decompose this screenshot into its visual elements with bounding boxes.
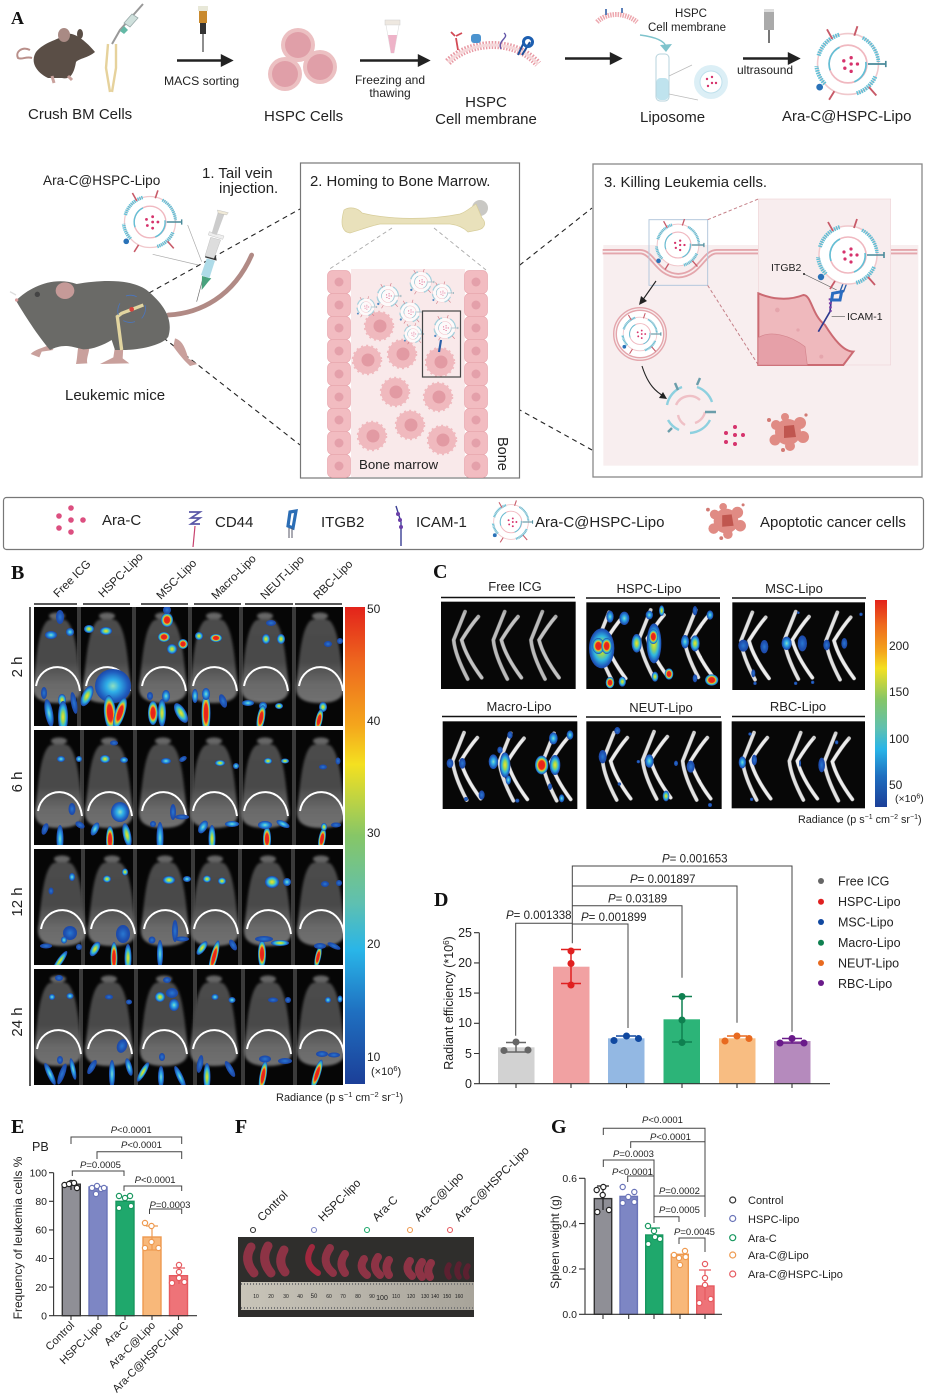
arrow (360, 56, 428, 65)
leukemia cells (353, 312, 456, 454)
colorbar B labels: (×10 (371, 1066, 393, 1078)
colorbar C labels (889, 639, 924, 805)
p-values: P=0.0002 (659, 1186, 700, 1197)
label: Ara-C@HSPC-Lipo: Ara-C@HSPC-Lipo (782, 108, 911, 125)
row labels (9, 657, 26, 1037)
label: HSPC Cells: HSPC Cells (264, 108, 343, 125)
y tick labels (562, 1173, 577, 1321)
colorbar C labels: 6 (916, 794, 920, 800)
bone wall cells (328, 270, 488, 478)
ruler: 150 (443, 1294, 451, 1300)
ruler: 140 (431, 1294, 439, 1300)
Macro signal (447, 730, 573, 803)
icon: CD44 (189, 512, 200, 547)
y axis title: Frequency of leukemia cells % (11, 1156, 25, 1319)
selection box (422, 311, 460, 377)
icon: lipo (493, 500, 533, 542)
panel D: radiant efficiency bar chart (434, 854, 901, 1091)
label: Leukemic mice: Leukemic mice (65, 387, 165, 404)
ruler: 120 (407, 1294, 415, 1300)
y tick labels: 25 (458, 926, 472, 940)
panel letter F: F (235, 1116, 247, 1138)
ruler: 110 (392, 1294, 400, 1300)
imaging row 24 h (34, 969, 345, 1091)
radiance label C: −1 (865, 814, 873, 821)
panel: homing to bone marrow (300, 163, 520, 478)
error bars and points (501, 948, 807, 1053)
colorbar B labels (367, 602, 401, 1078)
ruler: 100 (376, 1295, 388, 1302)
y tick labels: 0 (41, 1310, 47, 1322)
icon: endosome (615, 309, 665, 359)
column headers: RBC-Lipo (312, 558, 355, 602)
ruler: 160 (455, 1294, 463, 1300)
p-values: P<0.0001 (612, 1167, 653, 1178)
ruler: 50 (311, 1294, 318, 1300)
legend D: NEUT-Lipo (838, 956, 899, 970)
radiance label B: Radiance (p s (276, 1092, 344, 1104)
column headers: HSPC-Lipo (97, 551, 146, 600)
icon: HSPC cells (268, 28, 337, 91)
data points (594, 1184, 713, 1306)
panel B: in vivo imaging (9, 551, 403, 1104)
colorbar C labels: 100 (889, 732, 909, 746)
legend D: MSC-Lipo (838, 916, 894, 930)
axes (49, 1173, 197, 1320)
x labels: Ara-C@HSPC-Lipo (111, 1320, 186, 1395)
label: ultrasound: ultrasound (737, 63, 793, 77)
y tick labels: 5 (465, 1047, 472, 1061)
p-values: P<0.0001 (650, 1132, 691, 1143)
y tick labels: 0.0 (562, 1309, 577, 1321)
x labels: Control (44, 1320, 77, 1353)
ruler: 20 (268, 1294, 274, 1300)
icon: curved teal arrow (640, 35, 672, 52)
y tick labels: 10 (458, 1016, 472, 1030)
radiance label C: −2 (890, 814, 898, 821)
legend D: RBC-Lipo (838, 977, 892, 991)
axes (579, 1178, 722, 1319)
colorbar B labels: ) (398, 1066, 401, 1078)
icon: Ara-C@HSPC-Lipo (816, 26, 886, 100)
panel F: spleen photograph (235, 1116, 532, 1317)
label: CD44 (215, 514, 253, 531)
significance brackets (603, 1128, 705, 1252)
legend G: Ara-C@Lipo (748, 1250, 809, 1262)
y tick labels: 80 (35, 1196, 47, 1208)
panel letter D: D (434, 889, 448, 911)
colorbar B labels: 50 (367, 602, 381, 616)
colorbar B labels: 10 (367, 1050, 381, 1064)
HSPC signal (589, 605, 718, 688)
label: Ara-C@HSPC-Lipo: Ara-C@HSPC-Lipo (43, 173, 160, 188)
bars (498, 967, 810, 1084)
column headers: Macro-Lipo (210, 553, 259, 602)
label: HSPC Cell membrane: Cell membrane (435, 111, 537, 128)
radiance label B: −1 (344, 1090, 352, 1099)
ruler: 70 (340, 1294, 346, 1300)
radiance label B: −2 (370, 1090, 379, 1099)
icon: lipo particle (123, 190, 182, 252)
x labels (44, 1320, 186, 1395)
icon: MACS column (198, 6, 208, 52)
panel letter B: B (11, 562, 24, 584)
label: ICAM-1: ICAM-1 (847, 311, 883, 323)
x labels: Ara-C (102, 1320, 131, 1348)
ruler: 10 (253, 1294, 259, 1300)
row labels: 24 h (9, 1007, 26, 1037)
label: Freezing and thawing: Freezing and (355, 73, 425, 87)
legend D: Free ICG (838, 874, 889, 888)
label: ITGB2: ITGB2 (771, 262, 802, 274)
icon: femur (342, 200, 488, 233)
p-values: P= 0.001897 (630, 874, 696, 886)
legend D: Macro-Lipo (838, 936, 901, 950)
ruler: 90 (369, 1294, 375, 1300)
row labels: 6 h (9, 772, 26, 792)
colorbar C labels: ) (920, 793, 924, 805)
group markers (250, 1228, 452, 1232)
y tick labels: 15 (458, 986, 472, 1000)
legend band (4, 498, 924, 550)
group labels: Control (255, 1189, 291, 1224)
RBC signal (739, 732, 838, 801)
significance brackets (516, 866, 792, 1036)
radiance label C: −1 (910, 814, 918, 821)
binding receptor (439, 340, 441, 352)
row labels: 12 h (9, 887, 26, 917)
arrow (743, 54, 798, 63)
label: MACS sorting: MACS sorting (164, 74, 239, 88)
radiance label C: sr (898, 814, 910, 826)
spleens (248, 1246, 468, 1277)
legend G: Control (748, 1195, 783, 1207)
legend G: HSPC-lipo (748, 1214, 799, 1226)
y tick labels: 0.2 (562, 1264, 577, 1276)
panel letter G: G (551, 1116, 567, 1138)
label: Freezing and thawing: thawing (369, 86, 411, 100)
label: ITGB2 (321, 514, 364, 531)
column headers (52, 551, 355, 602)
ruler: 30 (283, 1294, 289, 1300)
y tick labels: 20 (35, 1282, 47, 1294)
heading: 3. Killing Leukemia cells. (604, 175, 767, 191)
p-values: P=0.0005 (659, 1205, 700, 1216)
legend D: HSPC-Lipo (838, 895, 901, 909)
label: tail vein injection: injection. (219, 180, 278, 197)
label: Bone: Bone (494, 437, 510, 471)
lipo particles (357, 269, 458, 344)
panel A: preparation workflow (11, 4, 911, 128)
p-values (506, 854, 728, 924)
y axis title: Radiant efficiency (*10 (442, 945, 456, 1070)
icon: apoptotic cell (706, 503, 746, 540)
y tick labels: 100 (29, 1168, 47, 1180)
panel letter E: E (11, 1116, 24, 1138)
arrow (177, 56, 231, 65)
label: Ara-C (102, 512, 141, 529)
label: Crush BM Cells: Crush BM Cells (28, 106, 132, 123)
imaging row 6 h (34, 730, 345, 854)
label: ICAM-1 (416, 514, 467, 531)
p-values: P<0.0001 (121, 1140, 162, 1151)
icon: leukemic mouse (10, 255, 252, 366)
icon: injection syringe (153, 210, 228, 302)
column headers: Free ICG (52, 558, 94, 600)
data points (62, 1180, 187, 1286)
icon: ruptured lipo (667, 378, 716, 433)
column headers: NEUT-Lipo (259, 554, 307, 602)
ruler: 60 (326, 1294, 332, 1300)
p-values: P<0.0001 (135, 1175, 176, 1186)
tail vein injection scene (10, 165, 278, 404)
panel letter C: C (433, 561, 447, 583)
label: PB: PB (32, 1140, 49, 1154)
y tick labels: 0.6 (562, 1173, 577, 1185)
label: HSPC Cell membrane: HSPC (465, 94, 507, 111)
colorbar B labels: 6 (393, 1064, 398, 1073)
colorbar C labels: (×10 (895, 793, 916, 805)
arrow (642, 366, 667, 399)
y axis title: 6 (442, 940, 451, 945)
radiance label B: sr (379, 1092, 391, 1104)
label: HSPC Cell membrane (small): Cell membrane (648, 22, 726, 34)
group labels (255, 1144, 532, 1224)
dashed connectors (142, 208, 592, 450)
bars (62, 1184, 187, 1316)
colorbar C (875, 600, 887, 807)
icon: ICAM-1 (396, 506, 403, 546)
radiance label C: cm (873, 814, 890, 826)
photo background (238, 1237, 474, 1317)
label: Ara-C@HSPC-Lipo (535, 514, 664, 531)
bars (594, 1196, 714, 1314)
arrow (565, 54, 620, 63)
radiance label C: ) (918, 814, 922, 826)
panel C: ex vivo bones (433, 561, 924, 826)
icon: lipo at membrane (656, 219, 704, 269)
panel E: leukemia frequency bar chart (11, 1116, 197, 1395)
icon: donor mouse and syringe (17, 4, 143, 92)
x labels: HSPC-Lipo (58, 1320, 105, 1367)
icon: ITGB2 (288, 511, 296, 538)
colorbar B labels: 20 (367, 937, 381, 951)
imaging row 2 h (33, 606, 344, 733)
panel G: spleen weight bar chart (548, 1115, 843, 1321)
column headers: MSC-Lipo (155, 557, 199, 602)
icon: Ara-C (56, 505, 86, 535)
icon: cell membrane (448, 32, 538, 64)
p-values: P=0.0003 (150, 1200, 190, 1211)
colorbar C labels: 50 (889, 778, 903, 792)
legend G: Ara-C@HSPC-Lipo (748, 1269, 843, 1281)
legend D (818, 874, 901, 991)
p-values: P=0.0045 (674, 1227, 715, 1238)
p-values: P=0.0003 (613, 1149, 654, 1160)
p-values: P= 0.001653 (662, 854, 728, 866)
headers: RBC-Lipo (770, 699, 826, 714)
legend G (730, 1195, 843, 1281)
label: Liposome: Liposome (640, 109, 705, 126)
y tick labels: 40 (35, 1253, 47, 1265)
y axis title: ) (442, 936, 456, 940)
bone images (441, 602, 865, 809)
panel letter A: A (11, 8, 24, 28)
row labels: 2 h (9, 657, 26, 677)
axes (474, 933, 830, 1088)
legend G: Ara-C (748, 1233, 777, 1245)
heading: 2. Homing to Bone Marrow. (310, 174, 490, 190)
group labels: Ara-C@HSPC-Lipo (452, 1144, 532, 1224)
arrow (639, 281, 656, 305)
group labels: HSPC-lipo (316, 1177, 363, 1224)
y tick labels: 0.4 (562, 1218, 577, 1230)
headers: Macro-Lipo (486, 699, 552, 714)
p-values: P<0.0001 (111, 1125, 152, 1136)
p-values (612, 1115, 715, 1238)
colorbar B (345, 607, 365, 1084)
significance brackets (71, 1137, 182, 1214)
icon: freezing tube (385, 20, 400, 53)
p-values: P= 0.001899 (581, 912, 647, 924)
icon: liposome tube (656, 54, 728, 101)
colorbar C labels: 200 (889, 639, 909, 653)
ruler: 80 (355, 1294, 361, 1300)
bone marrow background (351, 269, 465, 477)
p-values: P= 0.03189 (608, 894, 667, 906)
drawing (603, 199, 918, 466)
icon: zoomed lipo (818, 219, 884, 289)
p-values (80, 1125, 190, 1211)
y tick labels: 20 (458, 956, 472, 970)
radiance label B: ) (400, 1092, 403, 1104)
radiance label C: Radiance (p s (798, 814, 865, 826)
icon: released Ara-C (724, 425, 745, 446)
label: Bone marrow: Bone marrow (359, 457, 438, 472)
ruler (241, 1282, 474, 1310)
imaging row 12 h (34, 849, 345, 974)
y tick labels: 60 (35, 1224, 47, 1236)
x labels: Ara-C@Lipo (107, 1320, 158, 1371)
icon: ultrasound probe (764, 9, 774, 43)
y tick labels: 0 (465, 1077, 472, 1091)
label: Apoptotic cancer cells (760, 514, 906, 531)
y tick labels (458, 926, 472, 1091)
colorbar C labels: 150 (889, 685, 909, 699)
p-values: P<0.0001 (642, 1115, 683, 1126)
headers: HSPC-Lipo (616, 581, 682, 596)
headers: NEUT-Lipo (629, 700, 693, 715)
MSC signal (738, 611, 863, 685)
headers (486, 579, 826, 715)
colorbar B labels: 40 (367, 714, 381, 728)
radiance label B: −1 (391, 1090, 400, 1099)
y axis title: Spleen weight (g) (548, 1195, 562, 1289)
group labels: Ara-C@Lipo (412, 1170, 466, 1224)
colorbar B labels: 30 (367, 826, 381, 840)
NEUT signal (599, 727, 712, 807)
panel: killing leukemia cells (593, 164, 922, 477)
radiance label B: cm (352, 1092, 370, 1104)
label: HSPC Cell membrane (small): HSPC (675, 8, 707, 20)
y tick labels (29, 1168, 47, 1322)
ruler: 130 (421, 1294, 429, 1300)
p-values: P= 0.001338 (506, 910, 572, 922)
headers: Free ICG (488, 579, 542, 594)
ruler: 40 (297, 1294, 303, 1300)
icon: small membrane (597, 8, 637, 22)
label: tail vein injection: 1. Tail vein (202, 165, 273, 182)
zoom guides (328, 228, 486, 270)
group labels: Ara-C (370, 1194, 401, 1224)
headers: MSC-Lipo (765, 581, 823, 596)
p-values: P=0.0005 (80, 1160, 121, 1171)
icon: apoptotic cell (767, 413, 809, 452)
